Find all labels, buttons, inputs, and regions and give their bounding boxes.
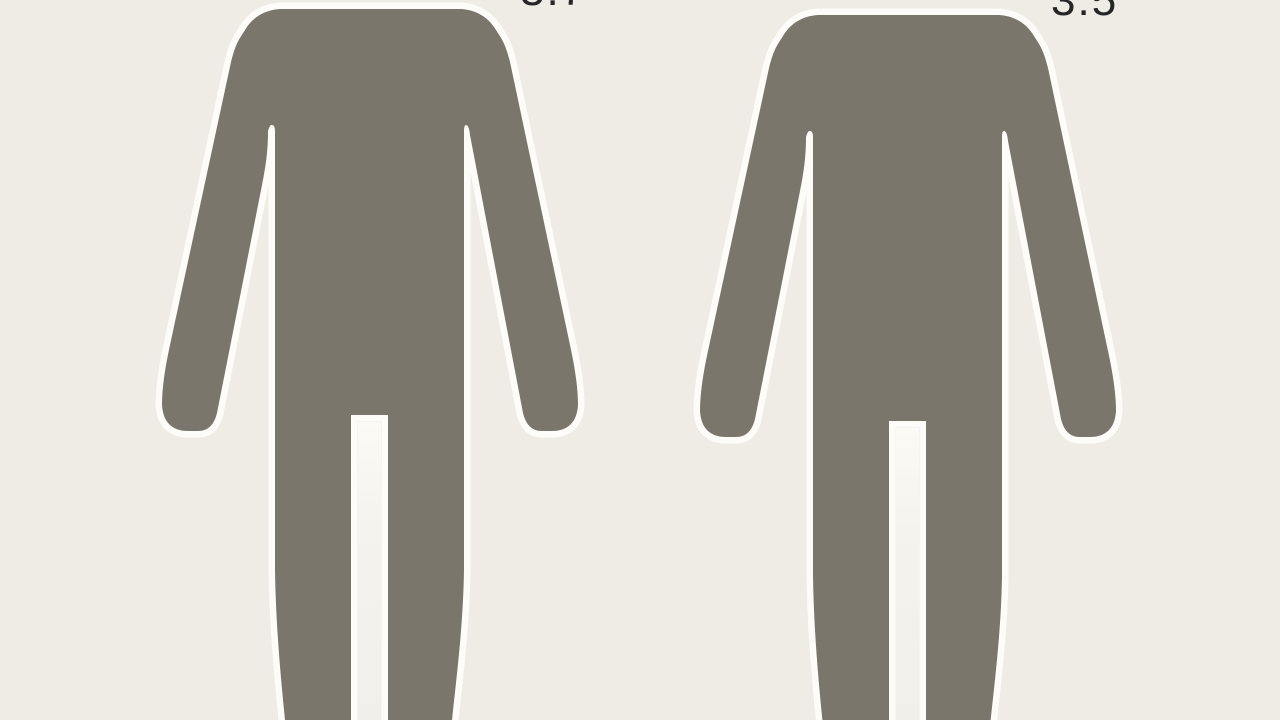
figure: right body silhouette [700, 15, 1116, 720]
leg gap [358, 422, 381, 720]
figure: left body silhouette [162, 9, 578, 720]
leg gap [896, 428, 919, 720]
